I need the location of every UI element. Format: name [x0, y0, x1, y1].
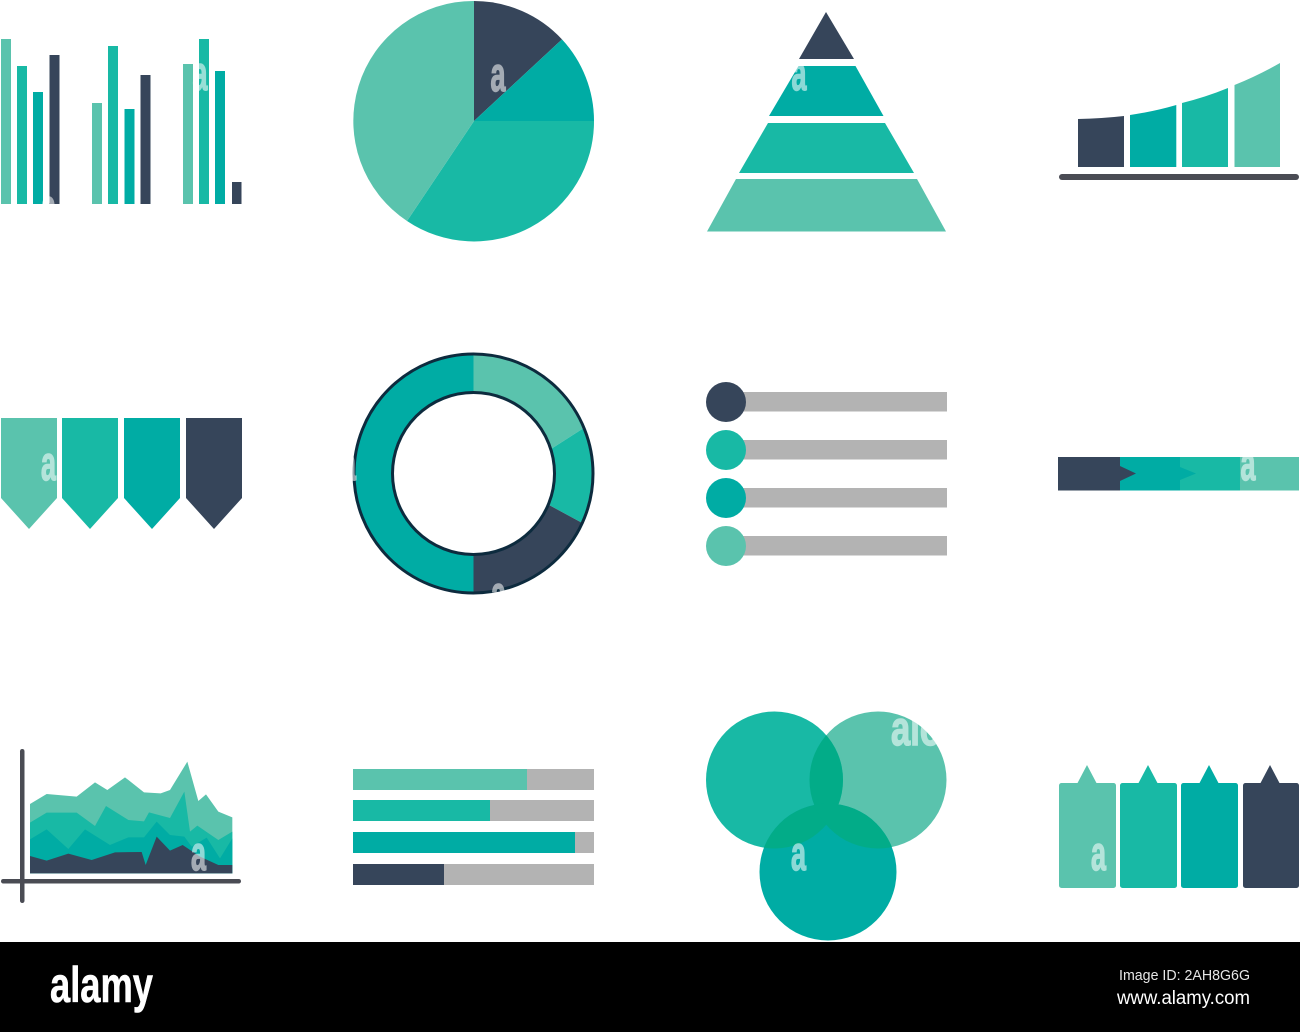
four downward pointing tags: [1, 418, 242, 529]
stacked area chart with axes: [1, 749, 241, 903]
footer logo: alamy: [50, 957, 153, 1013]
list with round bullets and grey bars: [706, 382, 947, 566]
footer bar: [0, 942, 1300, 1032]
watermark letters: a: [1091, 828, 1106, 881]
pyramid chart: [707, 12, 946, 232]
segmented arrow strip: [1058, 457, 1299, 490]
horizontal progress bars: [353, 769, 594, 885]
watermark letters: a: [491, 568, 506, 621]
donut chart: [354, 354, 594, 594]
watermark letters: a: [1240, 438, 1256, 491]
watermark letters: a: [41, 438, 56, 491]
watermark letters: a: [341, 438, 356, 491]
rising bar chart with baseline: [1059, 63, 1299, 180]
watermark letters: a: [41, 181, 56, 234]
pie chart: [353, 1, 594, 241]
watermark letters: a: [191, 828, 206, 881]
watermark letters: alo: [891, 703, 941, 756]
website: www.alamy.com: [1116, 988, 1250, 1009]
watermark letters: a: [791, 828, 806, 881]
grouped bar chart: [1, 39, 242, 204]
watermark letters: [41, 48, 1256, 881]
four cards with top arrows: [1059, 765, 1299, 888]
watermark letters: a: [792, 48, 807, 101]
venn diagram: [706, 712, 946, 940]
watermark letters: a: [490, 49, 506, 102]
image id: Image ID: 2AH8G6G: [1119, 967, 1250, 984]
watermark letters: a: [192, 48, 208, 101]
